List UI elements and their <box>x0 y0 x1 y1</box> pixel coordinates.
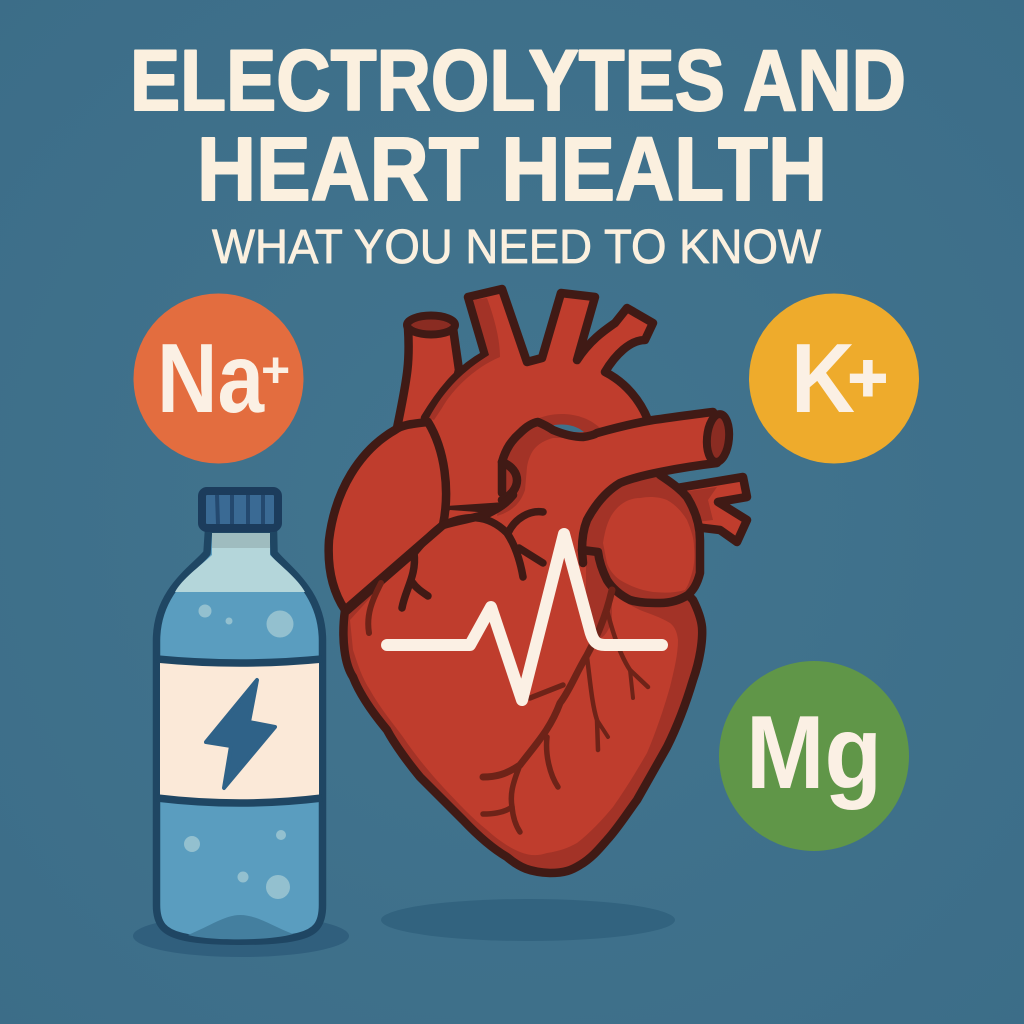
aortic arch shading <box>429 298 500 420</box>
bottle shadow <box>133 915 349 957</box>
potassium badge: K <box>791 323 855 433</box>
ventricle lit area <box>350 510 678 855</box>
title: ELECTROLYTES AND <box>130 33 906 129</box>
magnesium badge: Mg <box>746 695 882 811</box>
magnesium badge <box>719 661 909 851</box>
sodium badge: Na <box>157 323 265 433</box>
left atrium lit area <box>603 497 694 593</box>
left atrium <box>582 475 700 603</box>
bottle body <box>156 530 322 941</box>
right atrium <box>329 422 446 610</box>
neck shade <box>212 533 270 548</box>
lower bubbles <box>184 830 290 899</box>
title <box>130 33 906 220</box>
dark coronary grooves <box>347 512 543 611</box>
lower shading by pulmonary trunk <box>586 552 620 640</box>
ventricles <box>343 500 702 873</box>
subtitle: WHAT YOU NEED TO KNOW <box>212 221 822 274</box>
aortic arch <box>425 289 660 540</box>
empty upper part of bottle <box>175 533 305 592</box>
arch shading above pulmonary artery <box>535 414 602 436</box>
potassium badge <box>749 294 919 464</box>
cap ridges <box>217 495 263 524</box>
heart inner outlines <box>443 412 717 603</box>
bottle base hump <box>188 915 293 939</box>
title: HEART HEALTH <box>197 120 827 220</box>
bottle label <box>160 662 319 804</box>
superior vena cava <box>397 316 459 428</box>
water bottle <box>156 491 322 941</box>
label edges <box>157 659 322 803</box>
coronary vessels <box>368 583 648 832</box>
heart shadow <box>381 899 675 941</box>
icon: lightning bolt <box>206 680 275 788</box>
gap under arch <box>550 424 584 432</box>
bottle cap <box>202 491 278 528</box>
sodium badge: + <box>261 342 290 398</box>
right pulmonary branches <box>677 477 747 542</box>
potassium badge: + <box>848 340 888 416</box>
sodium badge <box>134 294 304 464</box>
upper bubbles <box>198 604 294 638</box>
branch shading <box>682 487 717 522</box>
heartbeat line <box>387 534 662 700</box>
pulmonary artery shading <box>497 426 580 516</box>
pulmonary artery <box>497 412 717 640</box>
heart <box>329 289 747 873</box>
aorta opening <box>705 413 731 463</box>
